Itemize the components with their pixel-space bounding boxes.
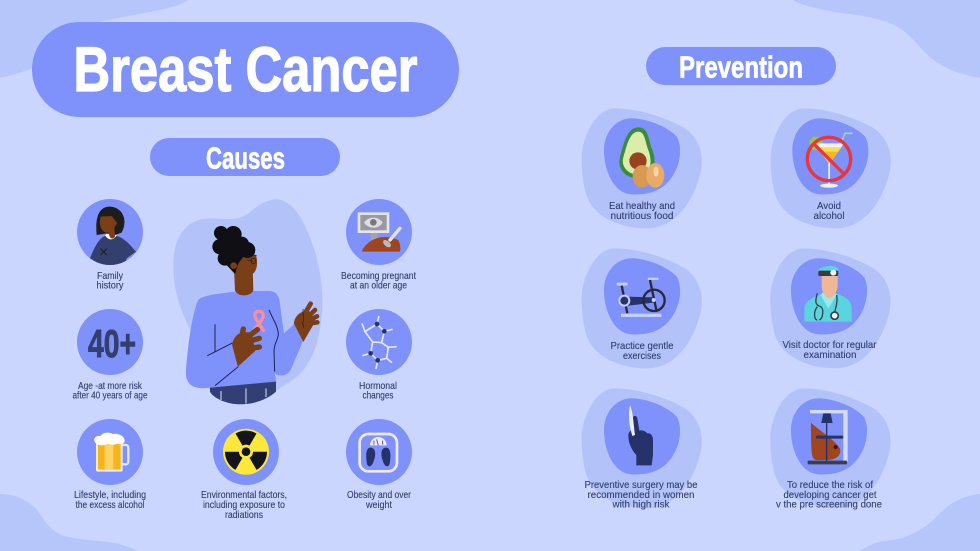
prevention: visit doctor: examination [804,349,857,361]
icon: doctor [804,266,852,322]
cause: lifestyle alcohol: the excess alcohol [76,499,144,511]
cause: obesity [346,419,412,511]
icon: exercise bike [617,278,665,317]
cause: lifestyle alcohol: Lifestyle, including [74,489,146,501]
cause: obesity: weight [365,499,392,511]
prevention: avoid alcohol: Avoid [817,200,841,212]
cause: environmental factors: Environmental factors, [201,489,287,501]
icon: crossed-out cocktail [807,133,853,188]
cause: environmental factors [201,419,287,521]
cause: family history: Family [97,270,124,282]
prevention: healthy food: Eat healthy and [609,200,675,212]
cause: pregnant at older age: Becoming pregnant [341,270,416,282]
cause: age over 40: 40+ [88,323,136,366]
prevention: visit doctor [770,248,891,368]
icon: hand with scalpel [628,405,653,465]
title [32,22,459,117]
prevention: preventive surgery: with high risk [612,498,670,510]
title: Breast Cancer [74,35,418,105]
cause: family history: history [96,280,124,292]
ribbon [254,311,264,332]
cause: environmental factors: radiations [225,509,263,521]
sweater [186,291,303,388]
prevention: preventive surgery: recommended in women [588,489,695,501]
icon: weighing scale [360,434,397,471]
cause: age over 40: after 40 years of age [72,390,148,402]
trousers [210,381,276,404]
heading: prevention: Prevention [679,50,803,84]
prevention: pre screening: developing cancer get [784,489,877,501]
hand on chest [232,329,259,366]
icon: mammography machine [808,410,848,464]
neck [234,267,253,296]
prevention: pre screening: To reduce the risk of [787,479,873,491]
corner shape: top left [0,0,188,78]
cause: age over 40: Age -at more risk [78,380,143,392]
cause: family history [77,199,143,292]
cause: pregnant at older age: at an older age [350,280,407,292]
face [237,252,257,275]
cause: environmental factors: including exposure to [203,499,285,511]
prevention: visit doctor: Visit doctor for regular [782,339,877,351]
icon: woman portrait [90,207,136,267]
heading: causes: Causes [206,140,285,176]
prevention: healthy food: nutritious food [610,210,674,222]
prevention: gentle exercises: Practice gentle [610,340,674,352]
cause: hormonal changes [346,309,412,402]
prevention: gentle exercises: exercises [623,350,661,362]
illustration: woman with pink ribbon [173,199,322,404]
prevention: preventive surgery: Preventive surgery may be [584,479,698,491]
cause: obesity: Obesity and over [347,489,411,501]
hair [212,226,255,274]
prevention: pre screening: v the pre screening done [776,498,882,510]
raised hand [294,304,317,342]
prevention: healthy food [582,108,702,228]
prevention: avoid alcohol [771,108,891,228]
icon: molecule [362,316,397,369]
corner shape: top right [793,0,980,78]
cause: pregnant at older age [341,199,416,292]
icon: beer mug [94,433,128,472]
icon: avocado and eggs [619,127,664,188]
cause: hormonal changes: Hormonal [359,380,397,392]
corner shape: bottom left [0,494,137,551]
prevention: pre screening [770,388,891,510]
cause: hormonal changes: changes [362,390,394,402]
corner shape: bottom right [860,494,980,551]
prevention: preventive surgery [582,388,702,510]
cause: lifestyle alcohol [74,419,146,511]
icon: radiation symbol [223,429,269,475]
prevention: gentle exercises [582,248,702,368]
cause: age over 40 [72,309,148,402]
icon: ultrasound [358,212,400,252]
heading: causes [150,138,340,176]
prevention: avoid alcohol: alcohol [814,210,844,222]
